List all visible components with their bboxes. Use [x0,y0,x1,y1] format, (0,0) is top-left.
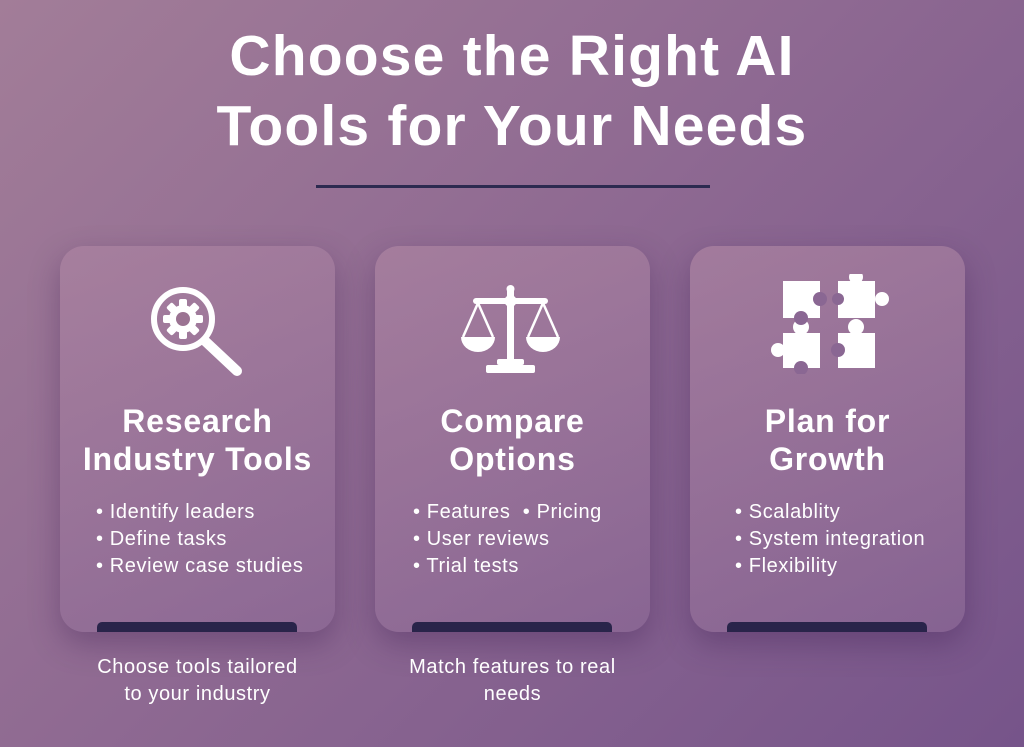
bullets: Flexibility [749,555,838,577]
caption 1: Choose tools tailored [97,656,298,678]
bullets: Review case studies [110,555,303,577]
title [217,24,807,158]
heading [765,403,890,477]
caption 1: to your industry [124,683,271,705]
title: Choose the Right AI [229,24,795,88]
heading: Plan for [765,403,890,439]
panel: growth [690,246,965,632]
bullets: System integration [749,528,925,550]
bullets [96,501,303,577]
bullets [736,501,925,577]
bullets: Scalablity [749,501,840,523]
bullets: Trial tests [426,555,519,577]
caption 1 [97,656,298,705]
panel: compare [375,246,650,632]
heading: Compare [440,403,585,439]
heading: Industry Tools [83,441,312,477]
title: Tools for Your Needs [217,94,807,158]
heading [83,403,312,477]
bullets: User reviews [427,528,550,550]
heading: Growth [769,441,886,477]
caption 2: Match features to real [409,656,616,678]
heading [440,403,585,477]
icon: puzzle [771,274,889,374]
bullets: Features • Pricing [427,501,602,523]
caption 2 [409,656,616,705]
icon: magnifier gear [151,287,242,376]
heading: Research [122,403,273,439]
bullets: Define tasks [110,528,227,550]
icon: scales [461,285,560,373]
bullets [414,501,602,577]
bullets: Identify leaders [110,501,255,523]
heading: Options [449,441,576,477]
caption 2: needs [484,683,541,705]
panel: research [60,246,335,632]
